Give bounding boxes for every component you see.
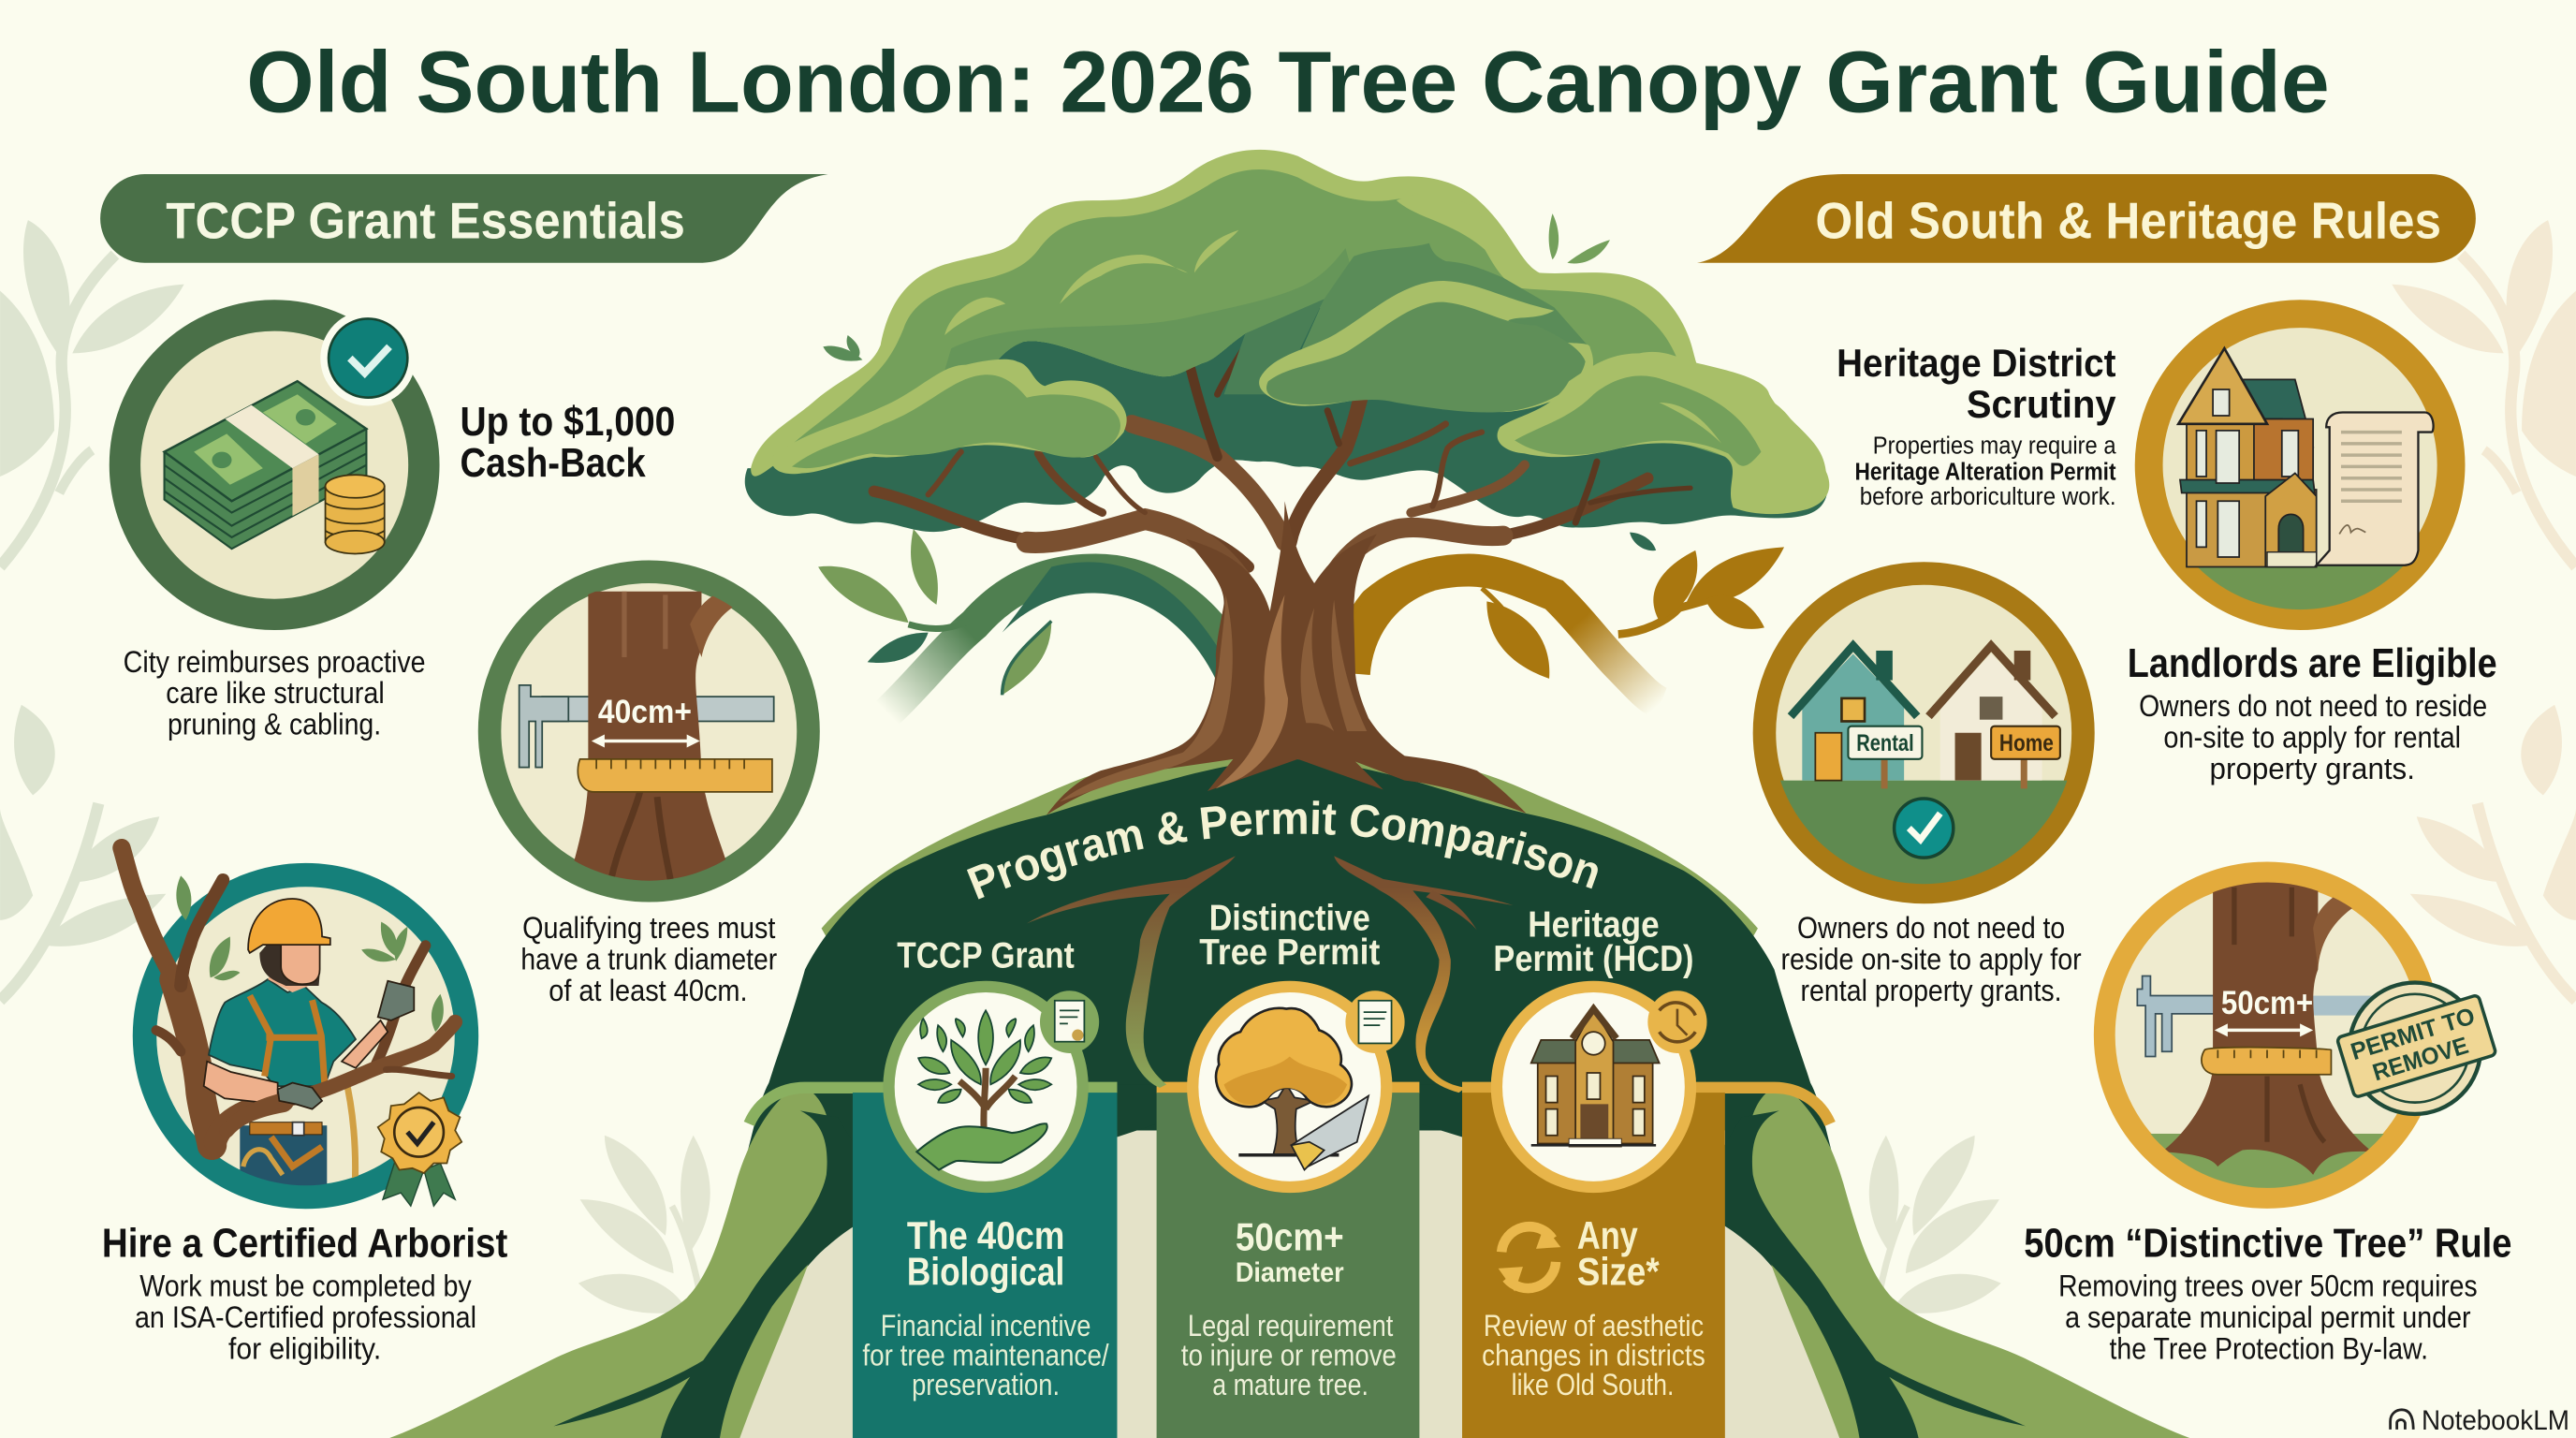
panel: arborist: for eligibility. [228, 1331, 381, 1365]
column: TCCP Grant: preservation. [912, 1368, 1060, 1401]
title: Old South London: 2026 Tree Canopy Grant Guide [246, 33, 2330, 130]
column: Distinctive Tree Permit: Tree Permit [1199, 932, 1380, 973]
branches [874, 332, 1690, 611]
column: Distinctive Tree Permit: Legal requirement [1188, 1309, 1393, 1343]
roots in dome [1027, 856, 1236, 1088]
column: TCCP Grant [853, 936, 1117, 1438]
panel: arborist: Hire a Certified Arborist [102, 1221, 508, 1267]
column: Heritage Permit (HCD): changes in districts [1482, 1338, 1705, 1372]
icon: trunk with caliper, tape and stamp [2104, 873, 2496, 1216]
panel: landlords: property grants. [2210, 752, 2415, 785]
canopy mid [779, 169, 1814, 485]
head [268, 958, 313, 992]
hill rim [822, 756, 1758, 986]
sign: Home [1991, 726, 2060, 759]
panel: heritage district: Properties may require a [1873, 431, 2116, 459]
panel: 40cm trunk: have a trunk diameter [520, 942, 777, 976]
column: Distinctive Tree Permit: to injure or remove [1181, 1338, 1397, 1372]
icon: money [124, 315, 424, 614]
panel: 50cm distinctive tree: 50cm “Distinctive Tree” Rule [2024, 1221, 2511, 1267]
leaves [176, 875, 444, 1032]
hill dome [746, 759, 1834, 1438]
panel: heritage district: before arboriculture work. [1860, 482, 2116, 510]
background sprigs left [0, 220, 184, 1001]
column: Heritage Permit (HCD): like Old South. [1512, 1368, 1674, 1401]
column: TCCP Grant: Biological [907, 1249, 1064, 1293]
column: Heritage Permit (HCD) [1462, 904, 1725, 1438]
canopy rim [751, 150, 1827, 485]
panel: 40cm trunk: of at least 40cm. [549, 974, 748, 1007]
arms [204, 1062, 278, 1104]
banner: Old South & Heritage Rules [1697, 174, 2476, 263]
icon: rental and home houses [1741, 574, 2102, 929]
panel: landlords: Owners do not need to [1797, 911, 2065, 945]
column: Heritage Permit (HCD): Size* [1577, 1249, 1660, 1293]
panel: heritage district [1837, 314, 2465, 631]
panel: 50cm distinctive tree: a separate municipal permit under [2065, 1300, 2471, 1334]
panel: arborist: Work must be completed by [139, 1269, 472, 1303]
side branch right [1354, 547, 1784, 703]
tree [745, 150, 1829, 814]
banner: TCCP Grant Essentials: TCCP Grant Essentials [166, 192, 685, 249]
canopy cluster right [1498, 352, 1829, 514]
trunk [1046, 501, 1526, 814]
side branch left [818, 529, 1224, 713]
harness [250, 996, 325, 1083]
column: Heritage Permit (HCD): Heritage [1528, 904, 1660, 945]
column: TCCP Grant: for tree maintenance/ [862, 1338, 1110, 1372]
stamp: permit to remove: PERMIT TO [2348, 1003, 2478, 1065]
panel: landlords: on-site to apply for rental [2163, 721, 2461, 755]
column: TCCP Grant: TCCP Grant [897, 936, 1075, 976]
icon: victorian house and scroll [2136, 314, 2465, 631]
check badge [1895, 799, 1954, 858]
medallion: tree and saw [1193, 987, 1405, 1187]
branches [122, 848, 426, 1145]
medallion: tree in hand [889, 987, 1099, 1187]
heading: Program & Permit Comparison: Program & Permit Comparison [967, 800, 1598, 899]
panel: arborist: an ISA-Certified professional [135, 1300, 476, 1334]
panel: landlords: Landlords are Eligible [2128, 640, 2497, 686]
canopy back [745, 296, 1827, 532]
panel: 40cm trunk [490, 572, 809, 1007]
column: TCCP Grant: The 40cm [907, 1213, 1064, 1257]
column: Distinctive Tree Permit [1157, 898, 1419, 1438]
right root [1721, 1084, 2193, 1438]
connector lines [749, 1088, 1117, 1123]
sign: Home: Home [1999, 731, 2054, 756]
canopy cluster left [771, 360, 1127, 474]
panel: cash-back: Up to $1,000 [460, 399, 675, 445]
icon: cycle arrows [1499, 1225, 1560, 1291]
banner: TCCP Grant Essentials [100, 174, 828, 263]
column: Distinctive Tree Permit: a mature tree. [1212, 1368, 1368, 1401]
canopy right shade [1281, 243, 1590, 394]
falling leaves [847, 335, 860, 359]
icon: certified badge [378, 1093, 461, 1206]
panel: 50cm distinctive tree [2024, 873, 2511, 1365]
stamp: permit to remove: REMOVE [2370, 1033, 2471, 1086]
panel: landlords: rental property grants. [1801, 974, 2062, 1007]
column: Heritage Permit (HCD): Any [1577, 1213, 1638, 1257]
panel: landlords: Owners do not need to reside [2139, 689, 2487, 723]
icon: check badge [320, 311, 416, 405]
shirt [209, 979, 356, 1086]
banner: Old South & Heritage Rules: Old South & Heritage Rules [1815, 192, 2441, 249]
sign: Rental [1848, 726, 1922, 759]
column: Distinctive Tree Permit: 50cm+ [1236, 1215, 1344, 1259]
panel: heritage district: Heritage Alteration Permit [1854, 457, 2116, 485]
medallion: heritage building [1497, 987, 1707, 1187]
leaves [818, 566, 909, 623]
icon: arborist in tree [122, 848, 466, 1197]
column: Distinctive Tree Permit: Distinctive [1209, 898, 1370, 938]
logo: NotebookLM: NotebookLM [2422, 1405, 2569, 1436]
panel: 50cm distinctive tree: the Tree Protection By-law. [2110, 1331, 2428, 1365]
left root [386, 1084, 832, 1438]
leaves [1653, 550, 1697, 621]
panel: arborist [102, 848, 508, 1365]
column: Heritage Permit (HCD): Review of aesthetic [1484, 1309, 1704, 1343]
panel: 40cm trunk: Qualifying trees must [522, 911, 775, 945]
stamp: permit to remove [2336, 983, 2496, 1114]
column: TCCP Grant: Financial incentive [881, 1309, 1090, 1343]
background sprig lower centre left [578, 1136, 710, 1314]
panel: 50cm distinctive tree: Removing trees over 50cm requires [2058, 1269, 2478, 1303]
hill and roots with comparison panel [386, 756, 2193, 1438]
panel: cash-back [124, 311, 675, 741]
panel: heritage district: Scrutiny [1967, 382, 2116, 426]
background sprig lower centre right [1869, 1136, 2001, 1314]
panel: cash-back: care like structural [166, 676, 385, 710]
panel: cash-back: pruning & cabling. [168, 707, 381, 741]
panel: landlords [1741, 574, 2497, 1007]
highlights [1060, 255, 1188, 304]
sign: Rental: Rental [1856, 731, 1914, 756]
beige ground [707, 1130, 1873, 1438]
icon: trunk with caliper and tape [490, 572, 809, 895]
background sprigs right [2392, 220, 2576, 1001]
foreground branch and gloves [227, 1022, 455, 1130]
column: Heritage Permit (HCD): Permit (HCD) [1493, 939, 1693, 979]
column: Distinctive Tree Permit: Diameter [1236, 1257, 1344, 1288]
canopy cluster centre right [1259, 281, 1593, 412]
panel: cash-back: Cash-Back [460, 440, 646, 486]
canopy lower shade [938, 248, 1364, 392]
icon: trunk with caliper, tape and stamp: 50cm+ [2221, 985, 2313, 1021]
icon: trunk with caliper and tape: 40cm+ [598, 694, 692, 730]
panel: heritage district: Heritage District [1837, 341, 2116, 385]
panel: landlords: reside on-site to apply for [1781, 942, 2082, 976]
panel: cash-back: City reimburses proactive [124, 645, 426, 679]
